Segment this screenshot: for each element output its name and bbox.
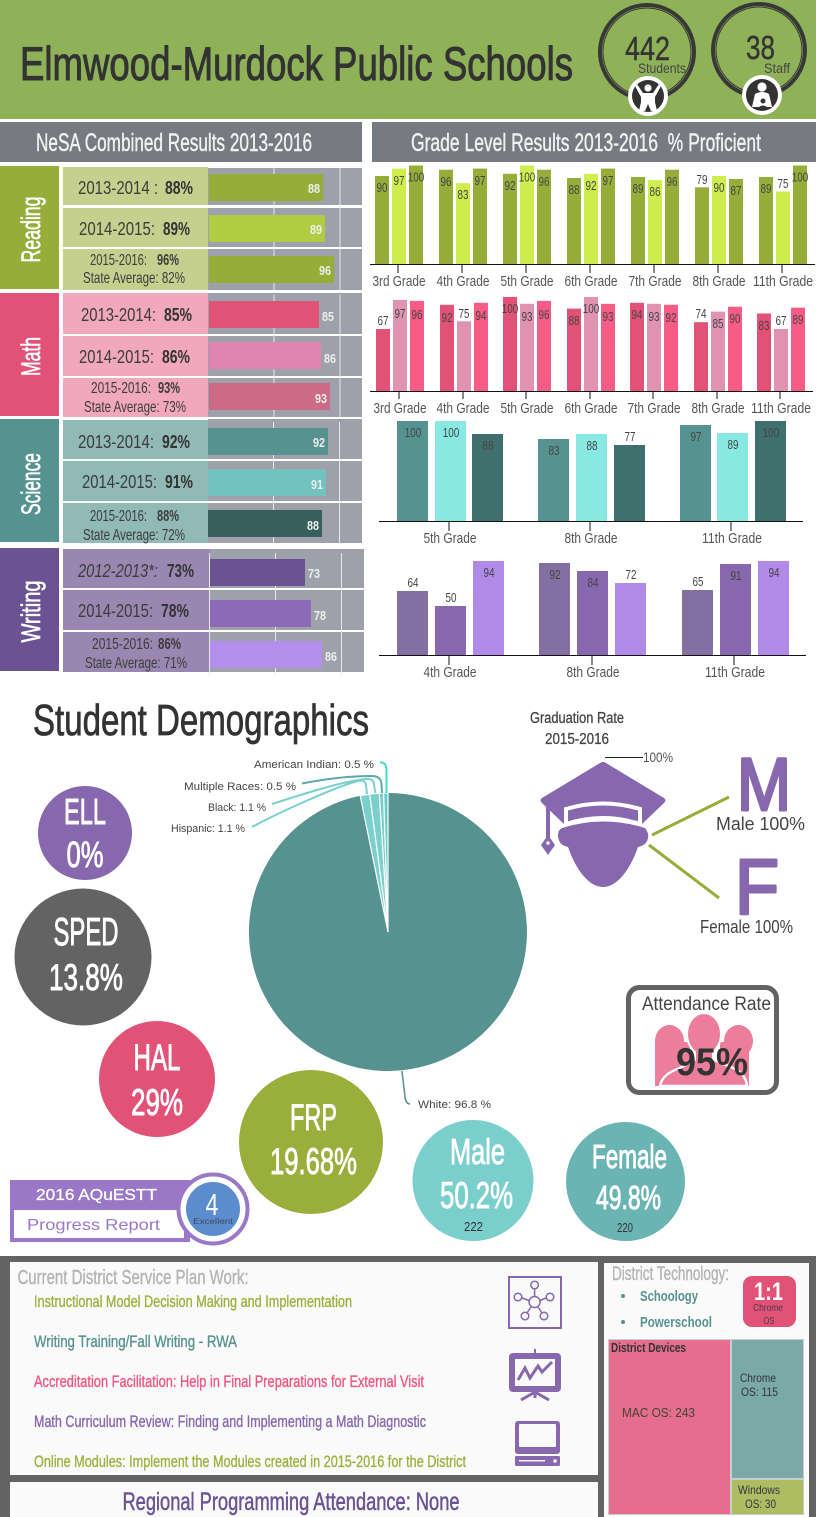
badge: rating 4 excellent [178, 1174, 248, 1244]
panel: writing results: 86 [325, 650, 337, 664]
tab: writing [0, 548, 59, 671]
stat circle: ELL: 0% [66, 834, 104, 875]
stat circle: SPED: SPED [54, 911, 118, 954]
bar chart: reading by grade: 8th Grade [692, 274, 746, 290]
icon: computer [515, 1421, 560, 1466]
female graduation rate [700, 843, 793, 937]
heading: grade level results [372, 122, 816, 162]
bar chart: math by grade [370, 297, 813, 417]
panel: district service plan: Accreditation Facilitation: Help in Final Preparations for External Visit [34, 1372, 424, 1391]
treemap: district devices [608, 1339, 804, 1515]
panel: reading results: 89 [310, 223, 322, 237]
bar chart: math by grade: 93 [522, 310, 533, 324]
tab: math [0, 293, 59, 416]
bar chart: science by grade: 100 [405, 426, 421, 440]
panel: math results: State Average: 73% [84, 399, 186, 416]
bar chart: math by grade: 4th Grade [436, 401, 490, 417]
panel: writing results: 73% [167, 560, 194, 581]
bar chart: reading by grade: 92 [586, 179, 597, 193]
bar chart: writing by grade: 94 [484, 566, 495, 580]
bar chart: reading by grade: 86 [650, 185, 661, 199]
panel: science results: 2013-2014: [78, 431, 154, 452]
icon: presentation board [509, 1349, 561, 1400]
bar chart: reading by grade: 79 [696, 173, 708, 187]
bar chart: math by grade: 7th Grade [628, 401, 680, 417]
panel: reading results: 2013-2014 : [78, 177, 158, 198]
bar chart: math by grade: 93 [648, 310, 660, 324]
bar chart: math by grade: 96 [412, 308, 423, 322]
icon: child [628, 76, 668, 116]
male graduation rate: M [737, 743, 791, 826]
callout: AQuESTT progress report: Progress Report [27, 1217, 161, 1234]
panel: science results: 92 [313, 436, 325, 450]
attendance rate card: 95% [676, 1041, 748, 1084]
stat circle: SPED [14, 888, 152, 1026]
stat circle: male: 50.2% [440, 1175, 513, 1216]
bar chart: writing by grade: 72 [626, 568, 637, 582]
panel: math results: 2014-2015: [79, 346, 154, 367]
graduation rate [530, 710, 729, 898]
panel: reading results: State Average: 82% [83, 270, 185, 287]
bar chart: science by grade: 5th Grade [424, 531, 476, 547]
bar chart: math by grade: 100 [583, 302, 599, 316]
tab: reading: Reading [16, 196, 46, 262]
treemap: district devices: Chrome [740, 1371, 776, 1385]
stat circle: male [412, 1120, 534, 1241]
bar chart: math by grade: 93 [602, 310, 614, 324]
panel: reading results: 96% [157, 252, 179, 269]
bar chart: science by grade: 88 [482, 439, 494, 453]
bar chart: reading by grade: 87 [730, 184, 742, 198]
title: Elmwood-Murdock Public Schools [20, 37, 573, 90]
stat circle: female: Female [592, 1138, 667, 1175]
panel: reading results: 88 [308, 182, 320, 196]
panel: district service plan: Current District Service Plan Work: [18, 1267, 248, 1289]
bar chart: science by grade: 77 [624, 430, 636, 444]
heading: student demographics: Student Demographics [33, 696, 369, 745]
bar chart: reading by grade: 90 [714, 181, 725, 195]
heading: NeSA combined results [0, 122, 362, 162]
panel: math results: 85% [164, 304, 192, 325]
bar chart: reading by grade: 96 [538, 175, 550, 189]
bar chart: reading by grade: 100 [408, 170, 424, 184]
panel: science results: 2014-2015: [82, 471, 157, 492]
staff counter [713, 4, 805, 115]
panel: math results: 2013-2014: [81, 304, 156, 325]
panel: math results: 2015-2016: [91, 380, 151, 397]
bar chart: reading by grade: 6th Grade [564, 274, 618, 290]
bar chart: science by grade: 88 [586, 439, 598, 453]
panel: reading results: 88% [165, 177, 193, 198]
staff counter: 38 [746, 29, 775, 66]
treemap: district devices: OS: 115 [741, 1385, 778, 1399]
panel: reading results: 96 [319, 264, 331, 278]
panel: district technology: District Technology: [612, 1264, 729, 1285]
panel: math results: 86% [162, 346, 190, 367]
bar chart: reading by grade: 92 [504, 179, 516, 193]
bar chart: reading by grade: 96 [666, 175, 678, 189]
panel: writing results: 2015-2016: [92, 636, 153, 653]
stat circle: HAL: HAL [134, 1037, 180, 1078]
bar chart: math by grade: 3rd Grade [374, 401, 426, 417]
panel: math results: 93 [315, 392, 327, 406]
stat circle: FRP [239, 1070, 383, 1214]
panel: writing results: State Average: 71% [85, 655, 187, 672]
pie chart: race and ethnicity: Black: 1.1 % [208, 802, 266, 814]
bar chart: reading by grade: 97 [474, 174, 486, 188]
bar chart: math by grade: 89 [792, 313, 804, 327]
bar chart: writing by grade: 84 [588, 576, 599, 590]
bar chart: math by grade: 97 [394, 307, 406, 321]
pie chart: race and ethnicity: American Indian: 0.5 % [254, 759, 374, 771]
treemap: district devices: OS: 30 [745, 1497, 776, 1511]
attendance rate card: Attendance Rate [642, 994, 771, 1015]
panel: writing results: 73 [308, 567, 320, 581]
bar chart: reading by grade: 97 [394, 174, 405, 188]
bar chart: math by grade: 100 [502, 302, 518, 316]
bar chart: science by grade: 97 [690, 430, 702, 444]
panel: science results: 91% [165, 471, 193, 492]
pie chart: race and ethnicity: Hispanic: 1.1 % [171, 823, 245, 835]
bar chart: math by grade: 83 [758, 319, 770, 333]
panel: science results: 88% [157, 508, 179, 525]
panel: math results [0, 293, 362, 417]
stat circle: female: 49.8% [596, 1179, 661, 1216]
panel: district service plan: Instructional Model Decision Making and Implementation [34, 1292, 352, 1311]
bar chart: reading by grade: 7th Grade [628, 274, 682, 290]
bar chart: math by grade: 94 [632, 308, 643, 322]
bar chart: writing by grade [379, 561, 806, 681]
callout: AQuESTT progress report [10, 1174, 248, 1244]
panel: writing results: 78% [161, 600, 189, 621]
stat circle: HAL [99, 1021, 215, 1137]
bar chart: math by grade: 67 [776, 314, 787, 328]
panel: district service plan [10, 1262, 598, 1475]
panel: district service plan: Math Curriculum Review: Finding and Implementing a Math Diagnostic [34, 1412, 426, 1431]
bar chart: reading by grade: 90 [376, 181, 388, 195]
panel: regional programming attendance [10, 1482, 598, 1517]
panel: science results: 88 [307, 519, 319, 533]
attendance rate card [628, 988, 776, 1092]
tab: reading [0, 166, 59, 289]
icon: graduate with cap [540, 762, 666, 887]
panel: reading results: 89% [163, 218, 190, 239]
treemap: district devices: Windows [738, 1483, 780, 1497]
bar chart: math by grade: 94 [476, 309, 487, 323]
stat circle: FRP: FRP [290, 1097, 337, 1138]
bar chart: science by grade: 100 [763, 426, 779, 440]
pie chart: race and ethnicity: White: 96.8 % [418, 1099, 491, 1111]
bar chart: science by grade: 89 [728, 438, 739, 452]
bar chart: math by grade: 6th Grade [564, 401, 618, 417]
panel: science results: 91 [311, 478, 323, 492]
bar chart: reading by grade: 89 [632, 182, 644, 196]
bar chart: writing by grade: 94 [768, 566, 780, 580]
stat circle: female: 220 [617, 1220, 633, 1235]
bar chart: science by grade: 8th Grade [564, 531, 618, 547]
panel: district service plan: Writing Training/Fall Writing - RWA [34, 1332, 238, 1351]
panel: science results [0, 419, 362, 544]
bar chart: math by grade: 92 [442, 311, 453, 325]
panel: writing results: 2014-2015: [78, 600, 153, 621]
bar chart: math by grade: 88 [568, 314, 580, 328]
panel: district service plan: Online Modules: Implement the Modules created in 2015-2016 for the District [34, 1452, 466, 1471]
bar chart: reading by grade: 83 [458, 188, 469, 202]
stat circle: male: 222 [464, 1219, 483, 1234]
header band [0, 0, 816, 119]
stat circle: ELL [38, 786, 132, 880]
heading: NeSA combined results: NeSA Combined Results 2013-2016 [36, 129, 312, 157]
treemap: district devices: MAC OS: 243 [622, 1405, 695, 1420]
panel: writing results [0, 548, 364, 675]
panel: district technology [604, 1263, 809, 1517]
panel: district technology: Powerschool [640, 1314, 712, 1331]
bar chart: reading by grade: 3rd Grade [372, 274, 426, 290]
panel: reading results: 2015-2016: [90, 252, 147, 269]
tab: math: Math [16, 337, 46, 376]
graduation rate: 100% [643, 749, 673, 765]
badge: 1:1 Chrome OS [743, 1276, 796, 1327]
students counter [600, 5, 694, 116]
panel: writing results: 86% [158, 636, 181, 653]
bar chart: writing by grade: 64 [408, 576, 419, 590]
bar chart: science by grade: 83 [548, 444, 560, 458]
bar chart: math by grade: 5th Grade [500, 401, 554, 417]
bar chart: reading by grade: 100 [792, 170, 808, 184]
tab: writing: Writing [16, 580, 46, 643]
students counter: Students [638, 60, 686, 76]
bar chart: math by grade: 90 [730, 312, 741, 326]
bar chart: math by grade: 75 [458, 307, 470, 321]
bar chart: science by grade [379, 421, 803, 547]
bar chart: math by grade: 74 [696, 307, 707, 321]
stat circle: SPED: 13.8% [49, 957, 123, 998]
stat circle: ELL: ELL [64, 791, 106, 832]
panel: regional programming attendance: Regional Programming Attendance: None [122, 1488, 460, 1516]
bar chart: writing by grade: 50 [446, 591, 457, 605]
bar chart: math by grade: 92 [666, 311, 677, 325]
bar chart: writing by grade: 65 [692, 575, 704, 589]
bar chart: science by grade: 11th Grade [702, 531, 762, 547]
male graduation rate [716, 743, 805, 834]
bar chart: reading by grade: 5th Grade [500, 274, 554, 290]
bottom dark band [0, 1256, 816, 1517]
bar chart: reading by grade: 88 [568, 183, 580, 197]
callout: AQuESTT progress report: 2016 AQuESTT [36, 1187, 157, 1204]
stat circle: HAL: 29% [131, 1082, 183, 1123]
badge: rating 4 excellent: 4 [206, 1187, 218, 1222]
bar chart: reading by grade: 96 [440, 175, 452, 189]
bar chart: reading by grade: 100 [519, 170, 535, 184]
bar chart: math by grade: 67 [378, 314, 389, 328]
bar chart: math by grade: 96 [538, 308, 550, 322]
bar chart: math by grade: 8th Grade [692, 401, 744, 417]
panel: science results: State Average: 72% [83, 527, 185, 544]
male graduation rate: Male 100% [716, 814, 805, 834]
panel: writing results: 2012-2013*: [77, 560, 158, 581]
bar chart: writing by grade: 8th Grade [566, 665, 620, 681]
panel: district technology: Schoology [640, 1288, 698, 1305]
bar chart: writing by grade: 4th Grade [424, 665, 476, 681]
icon: people [655, 1013, 753, 1086]
tab: science [0, 419, 59, 542]
panel: science results: 2015-2016: [90, 508, 147, 525]
bar chart: science by grade: 100 [443, 426, 459, 440]
panel: reading results [0, 166, 362, 290]
stat circle: male: Male [450, 1131, 505, 1172]
panel: reading results: 2014-2015: [79, 218, 155, 239]
female graduation rate: F [735, 843, 779, 931]
bar chart: writing by grade: 92 [550, 568, 561, 582]
bar chart: reading by grade: 4th Grade [436, 274, 490, 290]
panel: writing results: 78 [314, 609, 326, 623]
bar chart: reading by grade: 75 [778, 177, 789, 191]
badge: 1:1 Chrome OS: OS [764, 1316, 775, 1327]
stat circle: female [566, 1122, 685, 1241]
tab: science: Science [16, 453, 46, 515]
bar chart: reading by grade: 97 [602, 174, 614, 188]
graduation rate: Graduation Rate [530, 710, 624, 727]
bar chart: reading by grade: 89 [760, 182, 772, 196]
badge: 1:1 Chrome OS: 1:1 [754, 1278, 783, 1306]
panel: science results: 92% [162, 431, 190, 452]
stat circle: FRP: 19.68% [270, 1141, 357, 1182]
badge: rating 4 excellent: Excellent [193, 1216, 234, 1226]
bar chart: writing by grade: 11th Grade [705, 665, 765, 681]
icon: adult and child [742, 75, 782, 115]
panel: math results: 93% [158, 380, 180, 397]
treemap: district devices: District Devices [611, 1340, 686, 1355]
panel: math results: 85 [322, 310, 334, 324]
badge: 1:1 Chrome OS: Chrome [753, 1303, 783, 1314]
graduation rate: 2015-2016 [545, 731, 609, 748]
students counter: 442 [625, 30, 670, 67]
icon: network [509, 1277, 561, 1328]
panel: math results: 86 [324, 352, 336, 366]
bar chart: reading by grade [370, 166, 815, 290]
bar chart: writing by grade: 91 [730, 569, 742, 583]
staff counter: Staff [764, 60, 790, 76]
bar chart: math by grade: 85 [712, 317, 724, 331]
pie chart: race and ethnicity [171, 759, 527, 1111]
female graduation rate: Female 100% [700, 917, 793, 937]
pie chart: race and ethnicity: Multiple Races: 0.5 % [184, 781, 296, 793]
